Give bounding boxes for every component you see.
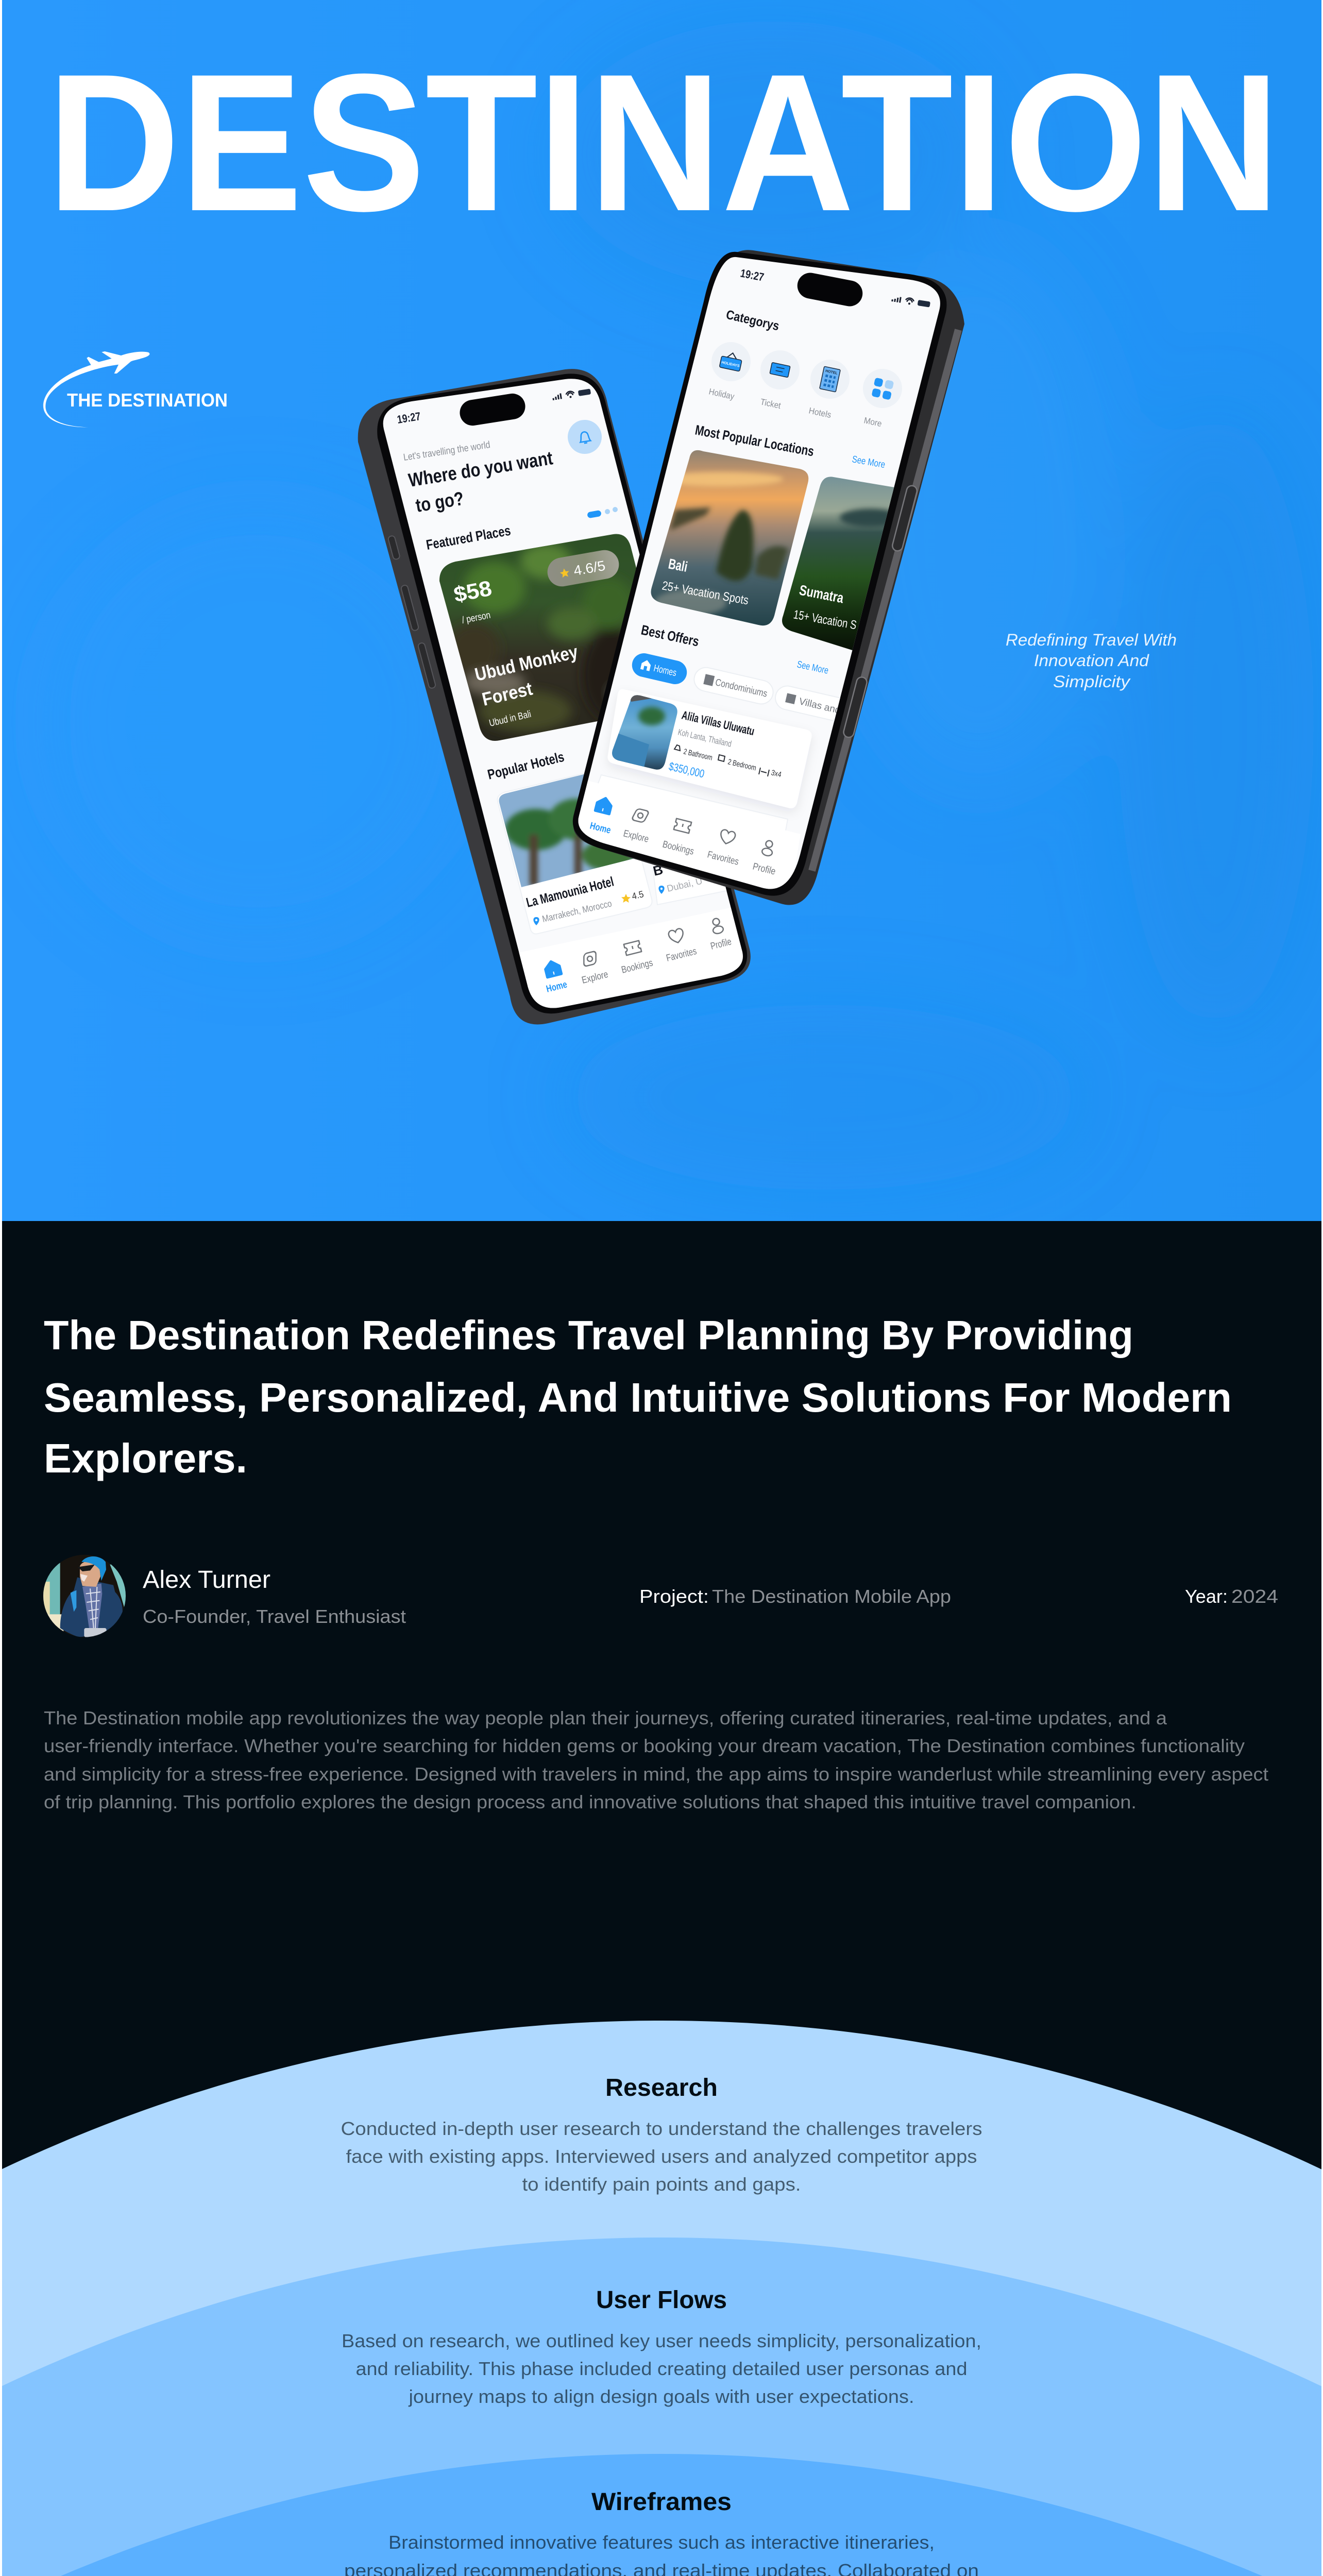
status icons (552, 388, 591, 401)
tagline: Redefining Travel With (1006, 631, 1177, 649)
category labels: Holiday (708, 386, 735, 401)
text: project meta: The Destination Mobile App (712, 1586, 951, 1607)
see more link 2: See More (796, 659, 829, 676)
place name: Ubud in Bali (488, 709, 532, 729)
price (452, 576, 494, 626)
filter pill: condominiums: Condominiums (714, 677, 768, 700)
bell button (568, 420, 602, 454)
card: Alila Villas Uluwatu (607, 689, 812, 808)
text: research body: to identify pain points and gaps. (522, 2174, 801, 2195)
category: hotels (807, 356, 853, 402)
heading: user flows: User Flows (596, 2286, 727, 2314)
bottom nav right: Favorites (706, 849, 740, 868)
text: intro paragraph: user-friendly interface. Whether you're searching for hidden gems or booking your dream vacation, The Destination combines functionality (44, 1735, 1245, 1756)
screen left (383, 379, 743, 1008)
text: research body (341, 2118, 982, 2195)
card: Alila Villas Uluwatu: 2 Bathroom (683, 747, 713, 762)
text: intro paragraph: The Destination mobile app revolutionizes the way people plan their journeys, offering curated itineraries, real-time updates, and a (44, 1707, 1167, 1728)
card: Bali (644, 443, 814, 631)
card: second offer (592, 775, 788, 845)
text: year meta (1185, 1586, 1278, 1607)
side buttons left (388, 535, 436, 689)
panel: research arc (0, 2021, 1323, 2391)
greeting: Let's travelling the world (403, 439, 491, 463)
card: Alila Villas Uluwatu: Alila Villas Uluwatu (681, 708, 756, 738)
filter pill: homes (630, 651, 689, 687)
status icons (891, 295, 930, 308)
text: project meta: Project: (639, 1586, 709, 1607)
card: Bali: 25+ Vacation Spots (661, 579, 750, 607)
filter pill: villas: Villas and (798, 696, 841, 716)
status time: 19:27 (396, 410, 421, 426)
card: Bali: Bali (667, 555, 689, 575)
filter pill: villas (773, 684, 863, 726)
card: Alila Villas Uluwatu: $350,000 (668, 760, 706, 781)
heading: intro statement: Explorers. (44, 1435, 247, 1481)
categories label: Categorys (725, 308, 781, 333)
notch (460, 394, 525, 426)
card: Sumatra: Sumatra (798, 582, 845, 606)
heading: intro statement: Seamless, Personalized, And Intuitive Solutions For Modern (44, 1375, 1232, 1420)
heading: wireframes: Wireframes (591, 2488, 732, 2516)
place name: Ubud Monkey (473, 641, 580, 685)
card: Alila Villas Uluwatu: Koh Lanta, Thailand (677, 727, 733, 749)
bottom nav left: Profile (709, 937, 733, 952)
card: second hotel: B (652, 861, 665, 879)
panel: user flows arc (0, 2238, 1323, 2576)
popular hotels label: Popular Hotels (486, 749, 566, 783)
text: user flows body: and reliability. This phase included creating detailed user personas and (355, 2358, 968, 2379)
text: author name and role: Co-Founder, Travel Enthusiast (143, 1606, 406, 1627)
card: Alila Villas Uluwatu: 2 Bedroom (727, 757, 757, 772)
bottom nav left (515, 905, 757, 1030)
category: hotels: HOTEL (825, 369, 838, 376)
category: holiday (708, 338, 754, 385)
card: Alila Villas Uluwatu: 3x4 (770, 768, 782, 779)
text: wireframes body: Brainstormed innovative features such as interactive itineraries, (388, 2532, 935, 2553)
card: La Mamounia Hotel (489, 762, 652, 934)
text: year meta: Year: (1185, 1586, 1228, 1607)
best offers label: Best Offers (640, 622, 700, 650)
most popular locations label: Most Popular Locations (694, 422, 815, 460)
category labels (708, 386, 883, 429)
card: La Mamounia Hotel: La Mamounia Hotel (524, 874, 615, 910)
title: DESTINATION: DESTINATION (47, 33, 1280, 252)
category: holiday: HOLIDAYS (721, 361, 740, 368)
phone body right (573, 250, 964, 905)
card: second hotel: Dubai, U (666, 876, 703, 894)
heading: where do you want to go: Where do you want (407, 447, 554, 491)
tagline (1006, 631, 1177, 691)
text: year meta: 2024 (1231, 1586, 1278, 1607)
category: ticket (757, 347, 803, 393)
card: La Mamounia Hotel: 4.5 (631, 889, 644, 902)
filter pill: homes: Homes (653, 663, 677, 679)
bottom nav right: Explore (622, 828, 650, 845)
bottom nav left: Favorites (665, 946, 698, 964)
text: wireframes body (344, 2532, 979, 2576)
tagline: Simplicity (1053, 672, 1131, 691)
notch (795, 270, 865, 309)
panel: intro dark background (0, 1221, 1323, 2576)
card: La Mamounia Hotel: Marrakech, Morocco (541, 898, 613, 924)
text: user flows body: Based on research, we outlined key user needs simplicity, personalization, (342, 2330, 981, 2351)
bottom nav left: Explore (581, 969, 609, 986)
bottom nav right: Bookings (662, 839, 695, 857)
screen right (567, 247, 958, 917)
place name (473, 641, 580, 729)
text: user flows body: journey maps to align design goals with user expectations. (408, 2386, 914, 2407)
avatar: Alex Turner (43, 1555, 126, 1637)
featured places label: Featured Places (425, 523, 512, 553)
bottom nav right: Profile (752, 861, 777, 877)
heading: where do you want to go (407, 447, 554, 516)
heading: intro statement (44, 1312, 1232, 1481)
phone: right mockup (567, 247, 964, 917)
pager dots (587, 507, 618, 518)
text: user flows body (342, 2330, 981, 2407)
category labels: More (863, 415, 883, 429)
phone: left mockup (358, 361, 773, 1030)
rating pill (545, 548, 621, 589)
side buttons right (842, 485, 918, 738)
logo: the destination (43, 351, 228, 427)
card: Ubud Monkey Forest (433, 526, 675, 747)
text: author name and role (143, 1566, 406, 1627)
status time: 19:27 (739, 266, 765, 284)
heading: intro statement: The Destination Redefines Travel Planning By Providing (44, 1312, 1133, 1358)
bottom nav left: Bookings (620, 957, 654, 976)
rating pill: 4.6/5 (572, 558, 606, 579)
category labels: Hotels (808, 405, 832, 420)
heading: where do you want to go: to go? (414, 488, 465, 516)
category: more (859, 365, 906, 412)
text: intro paragraph: and simplicity for a stress-free experience. Designed with travelers in mind, the app aims to inspire wanderlust while streamlining every aspect (44, 1764, 1268, 1785)
bottom nav left: Home (545, 979, 568, 995)
card: second hotel (652, 853, 744, 905)
card: Sumatra: 15+ Vacation S (792, 607, 858, 632)
icon: airplane swoosh (43, 351, 149, 427)
price: $58 (452, 576, 494, 607)
text: intro paragraph: of trip planning. This portfolio explores the design process and innovative solutions that shaped this intuitive travel companion. (44, 1791, 1137, 1812)
bottom nav right: Home (589, 820, 612, 836)
see more link: See More (851, 454, 886, 470)
logo wordmark: THE DESTINATION (67, 389, 228, 411)
text: research body: Conducted in-depth user research to understand the challenges travelers (341, 2118, 982, 2139)
place name: Forest (480, 678, 534, 710)
text: intro paragraph (44, 1707, 1268, 1812)
card: Sumatra (773, 471, 912, 652)
panel: wireframes arc (0, 2454, 1323, 2576)
price: / person (461, 610, 491, 626)
text: author name and role: Alex Turner (143, 1566, 270, 1594)
bottom nav right (567, 775, 801, 907)
tagline: Innovation And (1034, 651, 1149, 670)
text: research body: face with existing apps. Interviewed users and analyzed competitor apps (346, 2146, 977, 2167)
panel: hero background (0, 0, 1323, 1221)
filter pill: condominiums (692, 665, 775, 706)
category labels: Ticket (759, 397, 782, 411)
phone body left (358, 369, 751, 1024)
heading: research: Research (605, 2074, 718, 2102)
